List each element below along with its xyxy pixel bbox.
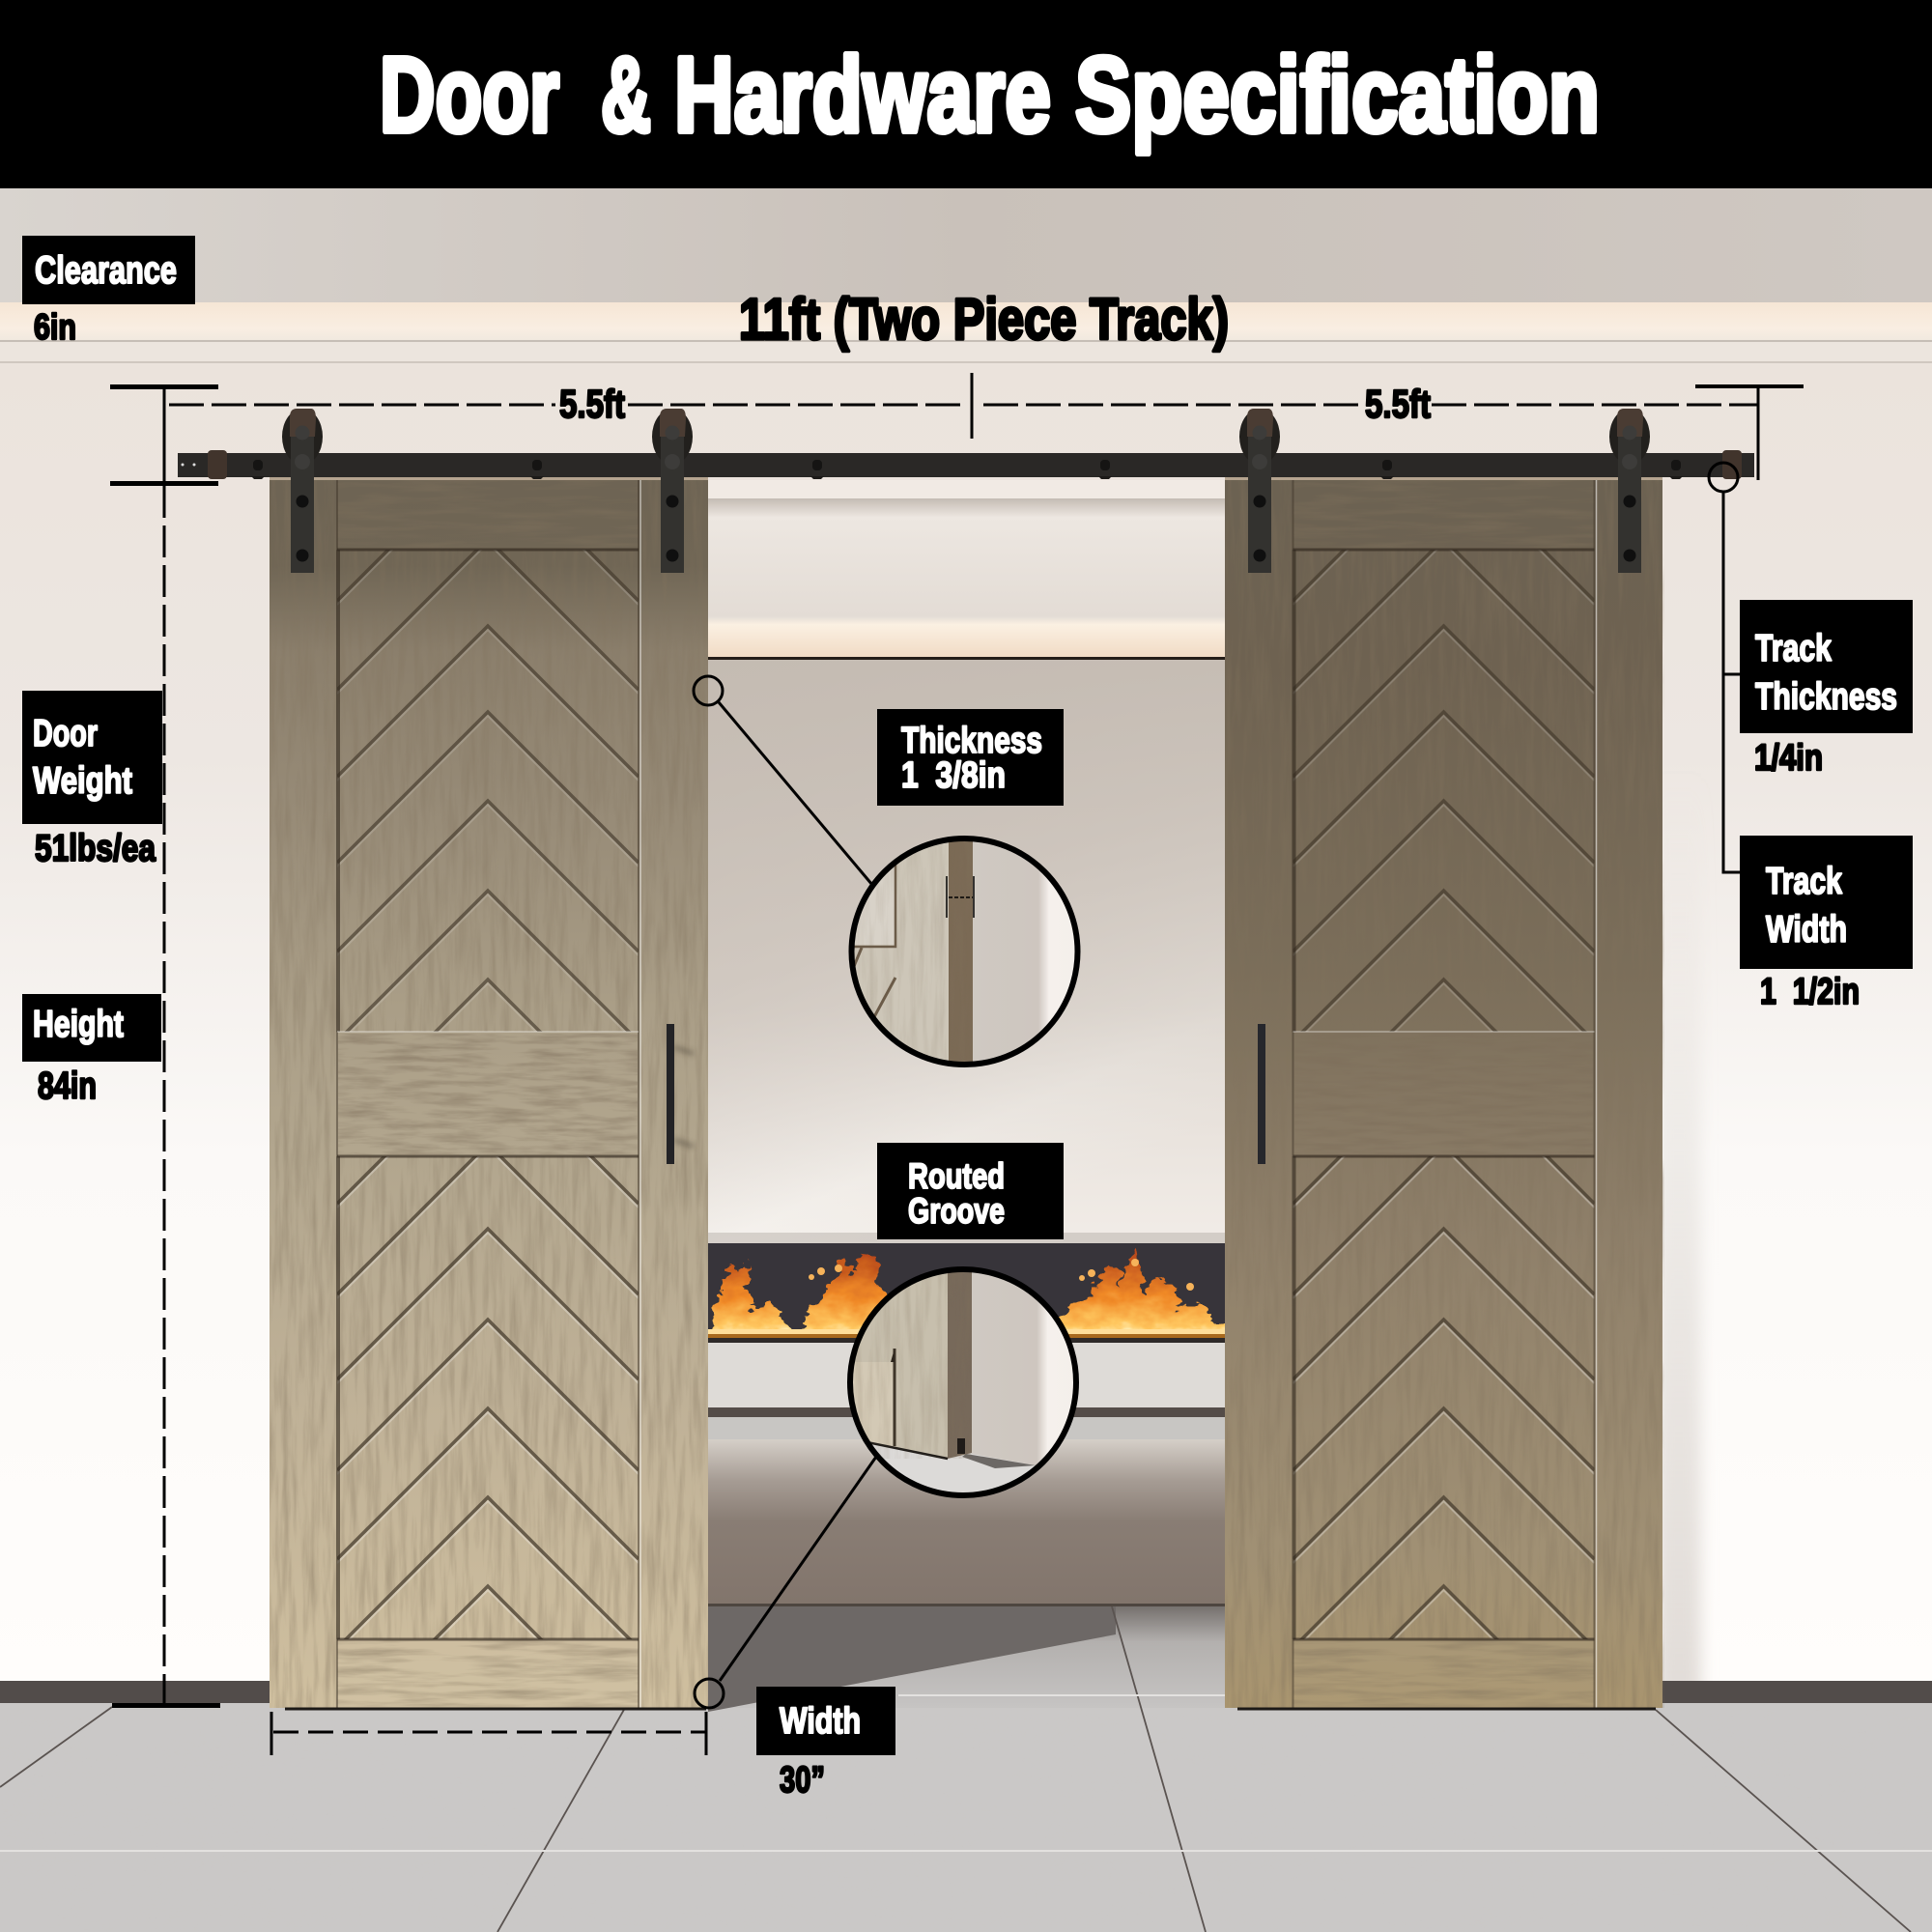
- barn door track: [178, 450, 1754, 479]
- door bottom edge: [869, 1441, 949, 1461]
- label: height: 84in: [38, 1065, 97, 1107]
- track bar: [178, 453, 1754, 477]
- callout: thickness leader: [694, 676, 872, 885]
- label: thickness: 1 3/8in: [901, 755, 1006, 796]
- door panels and chevron grooves: [1225, 450, 1663, 1741]
- label: width: Width: [780, 1701, 861, 1742]
- label: clearance: 6in: [34, 307, 76, 347]
- magnifier: door thickness: [850, 837, 1082, 1068]
- hanger right door right: [1609, 409, 1650, 573]
- label: door weight: 51lbs/ea: [35, 828, 156, 869]
- door face: [855, 1273, 948, 1458]
- door handle: [1258, 1024, 1265, 1164]
- title: Door: [380, 36, 559, 155]
- wall behind door: [972, 1273, 1073, 1465]
- floor shadow: [708, 1606, 1116, 1712]
- far floor: [708, 1417, 1225, 1439]
- label: track thickness: Track: [1755, 628, 1832, 669]
- rug: [708, 1439, 1225, 1605]
- hanger right door left: [1239, 409, 1280, 573]
- door slab: [270, 480, 708, 1708]
- label: door weight: Weight: [33, 760, 132, 802]
- dimension: center tick: [970, 373, 974, 439]
- floor: [872, 1445, 1036, 1492]
- door edge with groove: [948, 1267, 972, 1459]
- wall: [0, 363, 1932, 1681]
- dimension: door height: [112, 486, 220, 1708]
- callout: track detail leader: [1709, 463, 1740, 872]
- fire embers: [809, 1259, 1194, 1291]
- view through doorway: [708, 480, 1232, 1712]
- magnifier: routed groove: [848, 1267, 1080, 1499]
- bracket: clearance right: [1695, 384, 1804, 480]
- floor tile joints: [0, 1606, 1932, 1932]
- label: routed groove: Routed: [908, 1156, 1005, 1196]
- inner wall: [708, 660, 1225, 1243]
- dimension: right half track: 5.5ft: [1365, 382, 1431, 426]
- callout: groove leader: [695, 1457, 876, 1708]
- doorway lintel: [708, 480, 1225, 498]
- flames: [708, 1252, 1232, 1345]
- left door: [270, 450, 708, 1741]
- near floor: [708, 1606, 1225, 1708]
- concrete bench: [708, 1343, 1225, 1407]
- label: routed groove: Groove: [908, 1191, 1005, 1231]
- label: track width: Width: [1766, 909, 1847, 951]
- bracket: clearance left: [110, 384, 218, 486]
- label: width: 30”: [780, 1760, 825, 1801]
- title: Specification: [1075, 36, 1600, 155]
- label: track width: Track: [1766, 861, 1842, 902]
- label: door weight: Door: [33, 713, 98, 754]
- label: routed groove: [877, 1143, 1064, 1239]
- fire burner strip: [708, 1329, 1225, 1334]
- header band: [0, 0, 1932, 188]
- dimension: total track length: 11ft (Two Piece Track): [739, 287, 1229, 352]
- track bolts: [251, 460, 1683, 479]
- thickness marks: [947, 876, 974, 918]
- label: thickness: [877, 709, 1064, 806]
- door top gap: [270, 477, 1662, 480]
- door bottom shadow lines: [285, 1708, 1656, 1710]
- mid rail grain: [338, 1034, 638, 1155]
- label: clearance: Clearance: [35, 249, 177, 292]
- title: Hardware: [674, 36, 1051, 155]
- wall behind door: [1041, 873, 1074, 1030]
- fireplace band: [708, 1243, 1225, 1338]
- hanger left door left: [282, 409, 323, 573]
- dimension: door width: [270, 1712, 707, 1755]
- crown molding: [0, 340, 1932, 362]
- label: door weight: [22, 691, 162, 869]
- title: [380, 36, 1600, 155]
- dimension: left half track: 5.5ft: [559, 382, 625, 426]
- right door: [1225, 450, 1663, 1741]
- door handle: [667, 1024, 694, 1164]
- baseboard: [0, 1681, 1932, 1703]
- door face: [854, 842, 949, 1061]
- ceiling: [0, 188, 1932, 302]
- label: height: Height: [33, 1004, 124, 1045]
- door edge: [949, 837, 973, 1068]
- floor texture: [0, 1703, 1932, 1932]
- door shadow on wall: [1662, 1023, 1706, 1681]
- track mounting holes: [182, 464, 195, 466]
- label: track thickness: 1/4in: [1754, 738, 1823, 779]
- label: clearance: [22, 236, 195, 347]
- cove light: [0, 302, 1932, 340]
- floor: [0, 1703, 1932, 1932]
- label: height: [22, 994, 161, 1107]
- floor shadow: [962, 1454, 1036, 1468]
- label: track width: 1 1/2in: [1760, 972, 1860, 1012]
- label: width: [756, 1687, 895, 1801]
- title: &: [601, 36, 651, 155]
- hanger left door right: [652, 409, 693, 573]
- label: track width: [1740, 836, 1913, 1012]
- door slab: [1225, 480, 1662, 1708]
- label: thickness: Thickness: [901, 721, 1042, 761]
- track stops: [208, 450, 1742, 479]
- label: track thickness: [1740, 600, 1913, 779]
- mid rail grain: [1294, 1034, 1593, 1155]
- inner ceiling with glow: [708, 517, 1225, 659]
- door panels and chevron grooves: [270, 450, 708, 1741]
